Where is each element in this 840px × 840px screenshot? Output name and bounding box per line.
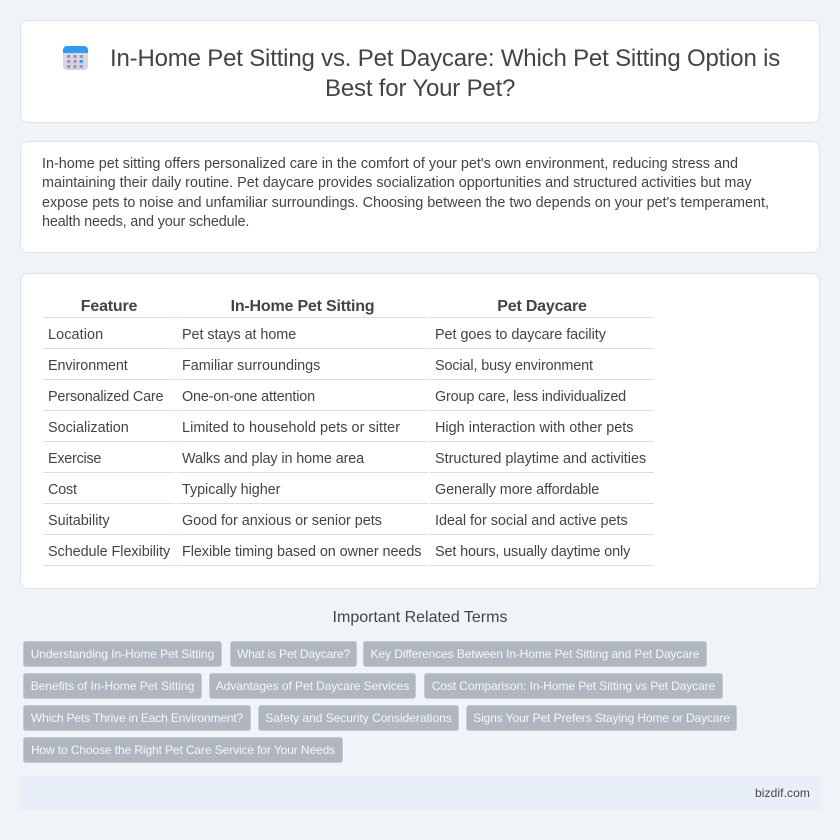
row: Location: Pet goes to daycare facility [435, 327, 606, 343]
intro paragraph [42, 156, 769, 230]
row: Cost [48, 482, 599, 498]
row: Cost: Typically higher [182, 482, 280, 498]
row: Environment [48, 358, 593, 374]
row: Socialization: High interaction with other pets [435, 420, 634, 436]
row: Exercise: Walks and play in home area [182, 451, 364, 467]
row: Personalized Care: Personalized Care [48, 389, 163, 405]
intro paragraph: In-home pet sitting offers personalized care in the comfort of your pet's own environment, reducing stress and [42, 156, 738, 172]
tag [23, 641, 222, 667]
intro paragraph: maintaining their daily routine. Pet daycare provides socialization opportunities and structured activities but may [42, 175, 752, 191]
intro paragraph: expose pets to noise and unfamiliar surroundings. Choosing between the two depends on your pet's temperament, [42, 195, 769, 211]
panel: title card [20, 20, 820, 123]
tag: What is Pet Daycare? [237, 647, 350, 661]
row: Cost: Cost [48, 482, 77, 498]
table header: Feature [81, 298, 137, 315]
row: Exercise [48, 451, 646, 467]
row: Schedule Flexibility: Flexible timing based on owner needs [182, 544, 421, 560]
title [110, 45, 780, 102]
title: Best for Your Pet? [325, 75, 515, 102]
tag: Which Pets Thrive in Each Environment? [31, 711, 243, 725]
footer bar [20, 776, 820, 810]
heading: related terms: Important Related Terms [333, 609, 507, 626]
row: Suitability [48, 513, 628, 529]
table header: In-Home Pet Sitting [231, 298, 374, 315]
footer brand: bizdif.com [755, 786, 810, 800]
row: Schedule Flexibility: Set hours, usually daytime only [435, 544, 630, 560]
row: Personalized Care: Group care, less individualized [435, 389, 626, 405]
row: Environment: Familiar surroundings [182, 358, 320, 374]
row: Suitability: Good for anxious or senior pets [182, 513, 382, 529]
row: Schedule Flexibility [48, 544, 630, 560]
panel: comparison table [20, 273, 820, 589]
tag list [23, 641, 737, 763]
tag: Understanding In-Home Pet Sitting [31, 647, 214, 661]
row: Environment: Environment [48, 358, 128, 374]
row: Suitability: Suitability [48, 513, 110, 529]
row: Personalized Care [48, 389, 626, 405]
icon: calendar [63, 46, 88, 70]
table header [81, 298, 587, 315]
tag: Benefits of In-Home Pet Sitting [31, 679, 194, 693]
tag [466, 705, 737, 731]
row: Location: Location [48, 327, 103, 343]
row: Location: Pet stays at home [182, 327, 296, 343]
row: Cost: Generally more affordable [435, 482, 599, 498]
tag [209, 673, 416, 699]
tag: Signs Your Pet Prefers Staying Home or Daycare [473, 711, 730, 725]
panel: intro text [20, 141, 820, 253]
tag: Advantages of Pet Daycare Services [216, 679, 409, 693]
tag [23, 705, 251, 731]
row: Socialization: Socialization [48, 420, 129, 436]
row: Schedule Flexibility: Schedule Flexibility [48, 544, 170, 560]
tag [424, 673, 723, 699]
table header: Pet Daycare [497, 298, 587, 315]
row: Environment: Social, busy environment [435, 358, 593, 374]
tag [258, 705, 459, 731]
tag [363, 641, 707, 667]
row: Socialization: Limited to household pets or sitter [182, 420, 400, 436]
title: In-Home Pet Sitting vs. Pet Daycare: Which Pet Sitting Option is [110, 45, 780, 72]
row: Socialization [48, 420, 634, 436]
row: Suitability: Ideal for social and active pets [435, 513, 628, 529]
tag: Safety and Security Considerations [265, 711, 452, 725]
tag: How to Choose the Right Pet Care Service for Your Needs [31, 743, 335, 757]
tag [230, 641, 357, 667]
row: Location [48, 327, 606, 343]
row: Personalized Care: One-on-one attention [182, 389, 315, 405]
intro paragraph: health needs, and your schedule. [42, 214, 249, 230]
tag: Cost Comparison: In-Home Pet Sitting vs Pet Daycare [432, 679, 715, 693]
tag [23, 737, 343, 763]
tag [23, 673, 202, 699]
row: Exercise: Exercise [48, 451, 101, 467]
tag: Key Differences Between In-Home Pet Sitting and Pet Daycare [371, 647, 699, 661]
row: Exercise: Structured playtime and activities [435, 451, 646, 467]
